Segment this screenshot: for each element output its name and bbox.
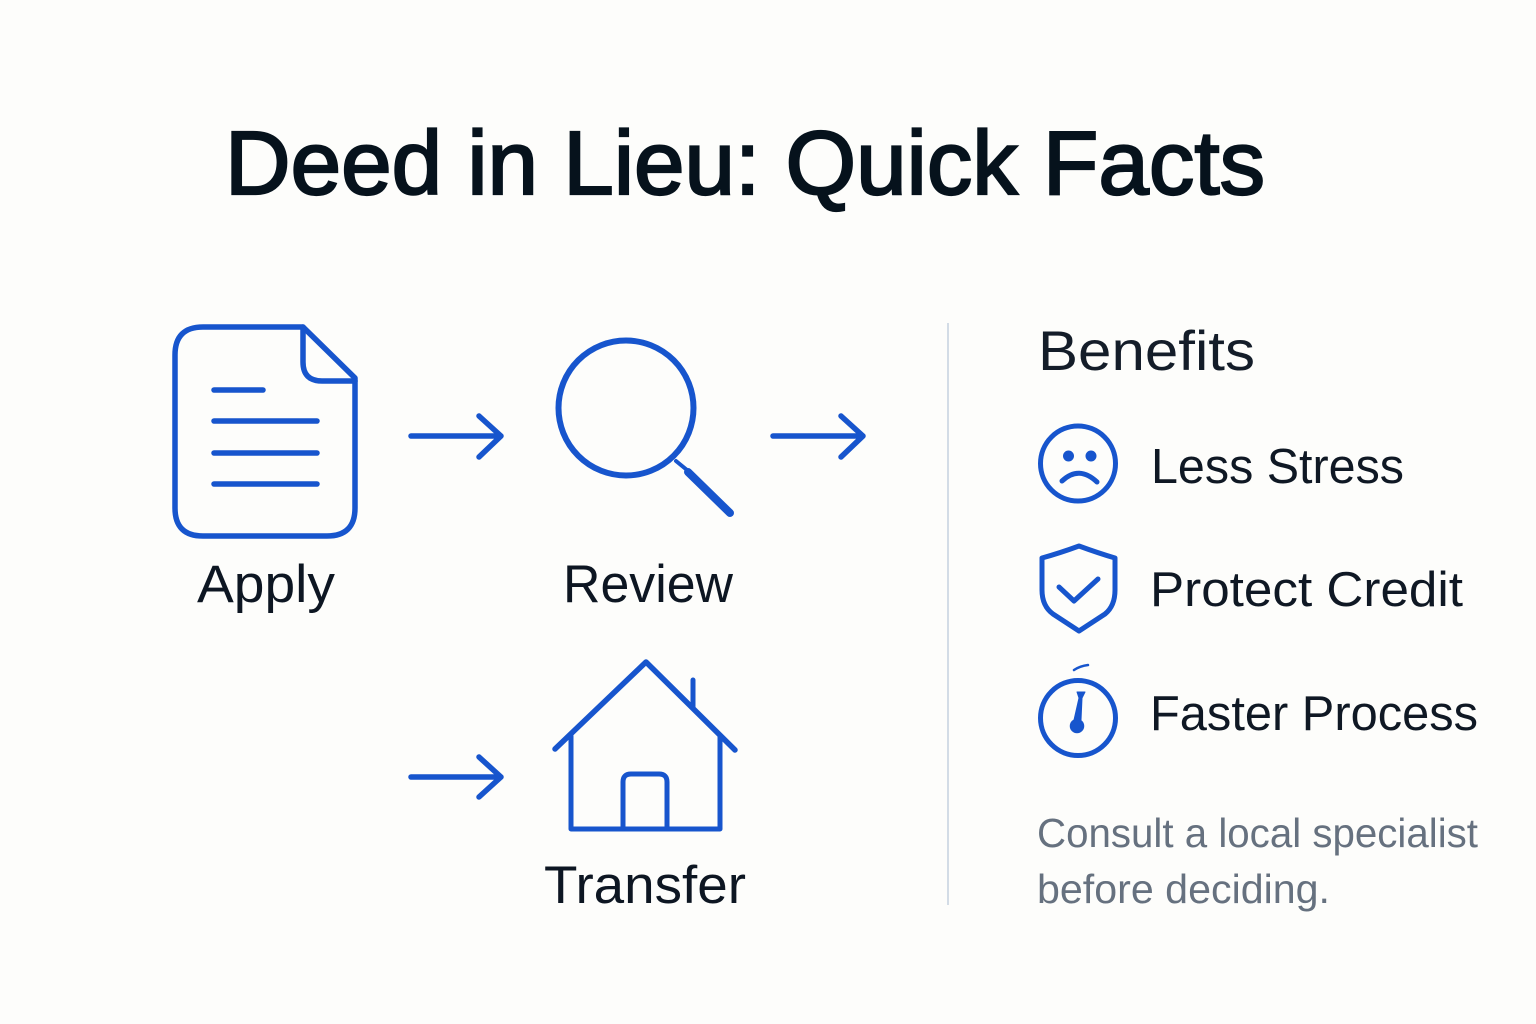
heading: Benefits: Benefits: [1038, 319, 1255, 382]
label: Transfer: Transfer: [544, 856, 746, 915]
icon: document: [175, 327, 355, 536]
label: Review: Review: [563, 555, 734, 614]
icon: face: [1040, 426, 1116, 501]
icon: shield: [1042, 546, 1115, 631]
icon: house: [555, 662, 735, 829]
note: Consult a local specialist: [1037, 810, 1479, 856]
benefit: Less Stress: Less Stress: [1151, 440, 1404, 494]
arrow: apply to review: [411, 416, 501, 457]
benefit: Protect Credit: Protect Credit: [1150, 563, 1463, 617]
icon: stopwatch: [1040, 665, 1116, 756]
benefit: Faster Process: Faster Process: [1150, 687, 1478, 741]
arrow: review onward: [773, 416, 863, 457]
note: before deciding.: [1037, 866, 1330, 912]
note: [1037, 810, 1479, 912]
label: Apply: Apply: [197, 555, 336, 614]
divider: [947, 323, 949, 905]
icon: magnifying glass: [558, 340, 730, 513]
title: Deed in Lieu: Quick Facts: [225, 114, 1265, 214]
arrow: to transfer: [411, 757, 501, 797]
